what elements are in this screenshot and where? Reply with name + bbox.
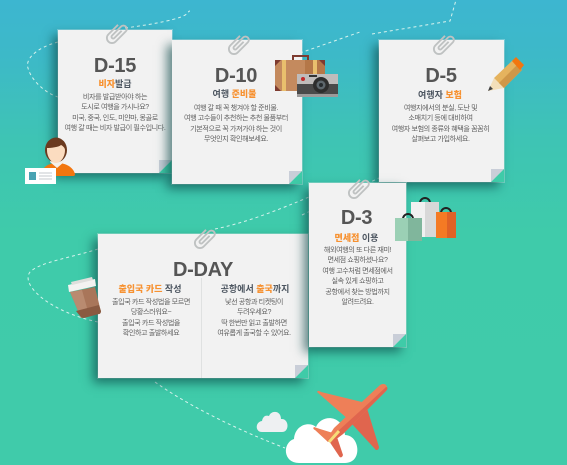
D-3 body text: 공항에서 찾는 방법까지 — [325, 288, 390, 296]
paperclip: D-3 — [348, 179, 370, 199]
D-3 body text: 해외여행의 또 다른 재미! — [324, 246, 391, 254]
page fold — [289, 171, 302, 184]
body: arrival card: 당황스러워요~ — [131, 308, 171, 316]
panel: D-5 — [379, 40, 504, 182]
body: airport: 낯선 공항과 티켓팅이 — [225, 298, 283, 306]
D-10 title: D-10 — [215, 65, 257, 87]
D-15 body text: 비자를 발급받아야 하는 — [83, 93, 147, 101]
D-15 body text — [65, 93, 166, 132]
D-10 body text: 여행 갈 때 꼭 챙겨야 할 준비물. — [194, 104, 278, 112]
icon: coffee cup — [68, 277, 101, 318]
D-5 body text: 소매치기 등에 대비하여 — [408, 114, 473, 122]
page fold — [159, 160, 172, 173]
paperclip: D-15 — [106, 24, 128, 44]
page fold — [295, 365, 308, 378]
icon: small cloud — [256, 412, 288, 432]
body: airport: 딱 한번만 읽고 출발하면 — [221, 319, 287, 327]
page fold — [491, 169, 504, 182]
D-5 body text: 살펴보고 가입하세요. — [411, 135, 470, 143]
D-10 body text — [184, 104, 288, 143]
D-5 body text: 여행지에서의 분실, 도난 및 — [404, 104, 477, 112]
icon: suitcase — [275, 55, 325, 91]
D-5 title: D-5 — [425, 65, 457, 87]
D-3 body text: 알려드려요. — [341, 298, 374, 306]
panel: D-DAY — [98, 234, 308, 378]
paperclip: D-10 — [228, 35, 250, 55]
D-15 title: D-15 — [94, 55, 136, 77]
D-10 body text: 무엇인지 확인해보세요. — [204, 135, 268, 143]
panel: D-15 — [58, 30, 172, 173]
D-3 body text: 여행 고수처럼 면세점에서 — [322, 267, 393, 275]
D-10 body text: 기본적으로 꼭 가져가야 하는 것이 — [190, 125, 282, 133]
D-15 body text: 도시로 여행을 가시나요? — [81, 103, 149, 111]
body: airport: 두려우세요? — [237, 308, 271, 316]
D-15 heading: 비자발급 — [98, 79, 132, 89]
body: airport — [217, 298, 291, 337]
D-3 title: D-3 — [341, 207, 372, 229]
D-3 body text: 면세점 쇼핑하셨나요? — [327, 256, 388, 264]
panel: D-3 — [309, 183, 406, 347]
heading: arrival card: 출입국 카드 작성 — [119, 284, 181, 294]
D-5 heading: 여행자 보험 — [418, 90, 462, 100]
D-10 heading: 여행 준비물 — [213, 89, 256, 99]
body: airport: 여유롭게 출국할 수 있어요. — [217, 329, 291, 337]
D-5 body text: 여행자 보험의 종류와 혜택을 꼼꼼히 — [392, 125, 489, 133]
body: arrival card: 확인하고 출발하세요 — [123, 329, 179, 337]
column divider — [201, 278, 202, 378]
D-5 body text — [392, 104, 489, 143]
D-10 body text: 여행 고수들이 추천하는 추천 물품부터 — [184, 114, 288, 122]
panel: D-10 — [172, 40, 302, 184]
icon: large cloud — [286, 418, 358, 463]
heading: airport: 공항에서 출국까지 — [221, 284, 289, 294]
paperclip: D-DAY — [194, 229, 216, 249]
body: arrival card: 출입국 카드 작성법을 — [122, 319, 180, 327]
icon: pencil — [488, 57, 524, 91]
D-3 body text: 실속 있게 쇼핑하고 — [332, 277, 383, 285]
icon: person with ID card — [25, 138, 75, 184]
body: arrival card — [112, 298, 190, 337]
paperclip: D-5 — [433, 35, 455, 55]
D-3 body text — [322, 246, 393, 306]
icon: shopping bags — [395, 197, 456, 241]
D-3 heading: 면세점 이용 — [335, 233, 378, 243]
D-15 body text: 미국, 중국, 인도, 미얀마, 몽골로 — [72, 114, 158, 122]
D-15 body text: 여행 갈 때는 비자 발급이 필수입니다. — [65, 124, 165, 132]
icon: camera — [297, 74, 338, 97]
body: arrival card: 출입국 카드 작성법을 모르면 — [112, 298, 190, 306]
D-DAY title: D-DAY — [173, 259, 233, 281]
page fold — [393, 334, 406, 347]
